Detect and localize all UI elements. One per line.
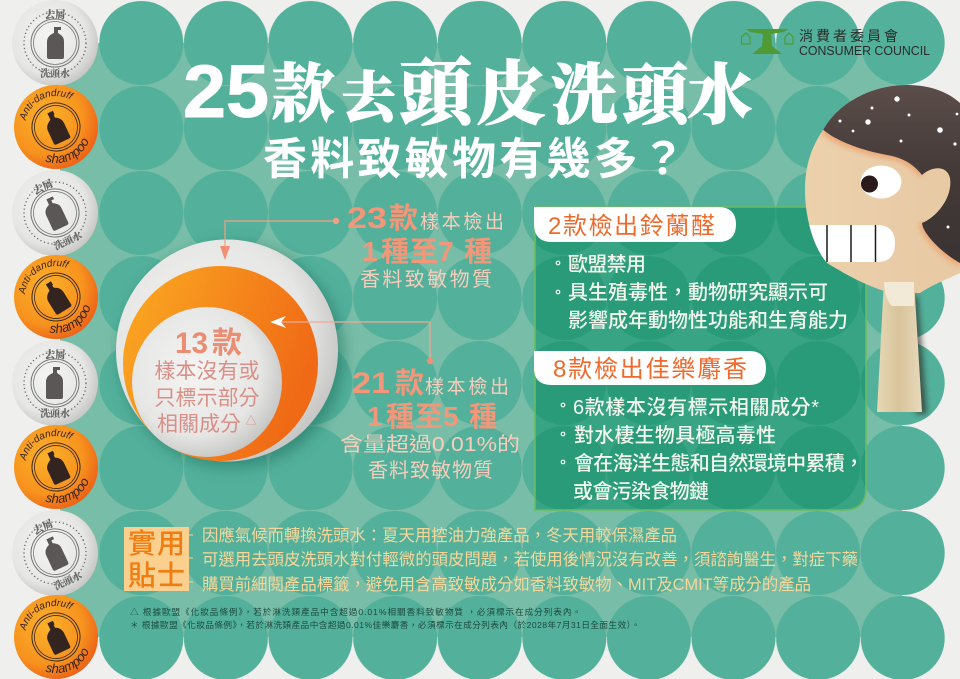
pill: 2 samples lilial: 2款檢出鈴蘭醛 [548, 213, 715, 240]
outer white ball [116, 240, 338, 462]
label: 13 samples: 款 [212, 327, 242, 360]
paddle handle [877, 280, 927, 414]
ball: orange 3: Anti-dandruff [20, 428, 74, 461]
list: lilial: 歐盟禁用 [568, 253, 646, 276]
label: 13 samples: △ [246, 414, 256, 427]
ball: white 3 [12, 340, 98, 426]
list: galaxolide: 會在海洋生態和自然環境中累積， [574, 451, 864, 475]
ball: orange 1: shampoo [46, 138, 88, 163]
text: 21 samples: 21 [352, 367, 390, 400]
ball: orange 2 [14, 255, 98, 339]
ball: orange 4 [14, 595, 98, 679]
text: 21 samples: 含量超過0.01%的 [340, 433, 520, 456]
label: 13 samples: 只標示部分 [154, 387, 260, 410]
ball: white 4 [0, 477, 131, 629]
ball: orange 1: Anti-dandruff [20, 88, 74, 121]
ball: orange 2: Anti-dandruff [19, 258, 70, 295]
text: 23 samples: 23 [347, 202, 387, 235]
text: 21 samples [340, 367, 520, 482]
text: 21 samples: 1種至5種 [367, 401, 497, 432]
ball: orange 2: shampoo [50, 305, 90, 334]
ball: white 4: 洗頭水 [52, 568, 84, 593]
footnotes [130, 606, 640, 630]
title [183, 50, 753, 134]
title: 款 [272, 60, 335, 130]
list: lilial: 影響成年動物性功能和生育能力 [568, 308, 848, 332]
orange ring [123, 266, 318, 461]
ball: orange 4: shampoo [46, 648, 88, 673]
arrow: 21 samples [270, 316, 433, 364]
tips badge: 貼士 [128, 560, 185, 591]
title: 25 [183, 50, 269, 133]
title: 水 [687, 60, 753, 133]
ball: orange 4: Anti-dandruff [20, 598, 74, 631]
panel: fragrance findings [534, 207, 866, 510]
subtitle: 香料致敏物有幾多？ [263, 135, 685, 184]
logo: Consumer Council: CONSUMER COUNCIL [799, 43, 930, 58]
ball: white 1: 洗頭水 [40, 67, 70, 80]
pill: 8 samples galaxolide [534, 351, 766, 385]
tips badge: 實用 [128, 528, 185, 559]
list: galaxolide [561, 396, 864, 503]
ball: white 1 [12, 0, 98, 86]
title: 去 [341, 68, 400, 129]
ball: orange 1 [14, 85, 98, 169]
tips text: 可選用去頭皮洗頭水對付輕微的頭皮問題，若使用後情況沒有改善，須諮詢醫生，對症下藥 [202, 551, 858, 569]
footnotes: ＊ 根據歐盟《化妝品條例》，若於淋洗類產品中含超過0.01%佳樂麝香，必須標示在成分列表內（於2028年7月31日全面生效）。 [130, 619, 640, 630]
ball: white 1: 去屑 [44, 8, 66, 21]
list: galaxolide: 對水棲生物具極高毒性 [574, 424, 776, 447]
ball: white 2 [0, 137, 131, 289]
ball: white 4: 去屑 [31, 517, 55, 537]
arrow: 23 samples [220, 218, 339, 260]
ball: white 2: 洗頭水 [52, 228, 84, 253]
ball: orange 3 [14, 425, 98, 509]
big ball diagram [116, 240, 344, 468]
title: 頭 [622, 60, 693, 133]
list: lilial: 具生殖毒性，動物研究顯示可 [568, 281, 828, 304]
text: 23 samples: 樣本檢出 [420, 211, 504, 233]
inner white ball [132, 307, 282, 457]
pill: 8 samples galaxolide: 8款檢出佳樂麝香 [553, 356, 747, 383]
icon: scales [742, 29, 793, 54]
list: galaxolide: 或會污染食物鏈 [573, 480, 709, 503]
logo: Consumer Council: 消費者委員會 [799, 28, 898, 44]
text: 23 samples: 款 [389, 202, 418, 235]
paddle character [805, 80, 960, 414]
pill: 2 samples lilial [534, 207, 736, 242]
text: 23 samples: 1種至7種 [362, 236, 492, 267]
paddle head [805, 85, 960, 293]
title: 頭 [399, 53, 477, 134]
list: lilial [556, 253, 848, 332]
text: 21 samples: 香料致敏物質 [368, 459, 493, 482]
ball: white 3: 洗頭水 [40, 407, 70, 420]
logo: Consumer Council [742, 28, 930, 58]
label: 13 samples: 13 [175, 327, 208, 360]
title: 洗 [551, 60, 617, 133]
label: 13 samples [154, 327, 260, 436]
tips badge [124, 527, 189, 591]
ball: white 2: 去屑 [31, 177, 55, 197]
ball: orange 3: shampoo [46, 478, 88, 503]
title: 皮 [476, 57, 546, 134]
text: 21 samples: 樣本檢出 [425, 376, 509, 398]
hair [818, 80, 960, 263]
text: 23 samples [347, 202, 504, 291]
footnotes: △ 根據歐盟《化妝品條例》，若於淋洗類產品中含超過0.01%相關香料致敏物質 ，必須標示在成分列表內。 [130, 606, 581, 617]
tips text: 購買前細閱產品標籤，避免用含高致敏成分如香料致敏物、MIT及CMIT等成分的產品 [202, 575, 811, 594]
ball: white 3: 去屑 [44, 348, 66, 361]
tips text [189, 526, 858, 594]
teeth [805, 225, 895, 262]
list: galaxolide: 6款樣本沒有標示相關成分* [573, 396, 819, 419]
label: 13 samples: 相關成分 [157, 413, 241, 436]
text: 23 samples: 香料致敏物質 [360, 268, 492, 291]
text: 21 samples: 款 [395, 367, 424, 400]
eye [860, 166, 902, 198]
tips text: 因應氣候而轉換洗頭水：夏天用控油力強產品，冬天用較保濕產品 [202, 526, 677, 545]
label: 13 samples: 樣本沒有或 [154, 360, 260, 383]
